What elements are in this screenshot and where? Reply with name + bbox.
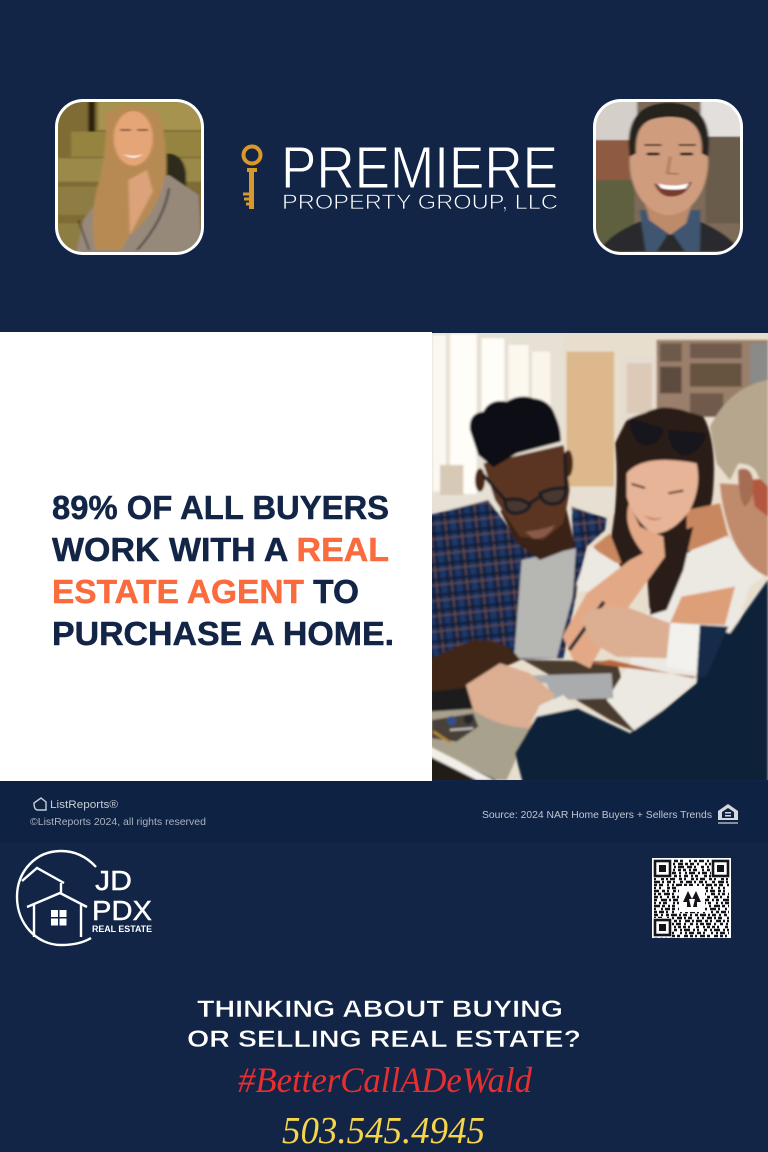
portrait: female agent — [54, 99, 206, 257]
table surface — [430, 708, 530, 780]
face — [627, 460, 698, 534]
neck and face — [500, 503, 575, 560]
JD PDX Real Estate logo — [17, 851, 152, 945]
ListReports credit: ListReports® — [50, 799, 118, 811]
header: agents and brokerage logo — [54, 99, 745, 257]
keys — [432, 713, 478, 743]
logo text: REAL ESTATE — [92, 924, 152, 934]
suit — [515, 580, 768, 785]
woman hair top — [646, 406, 688, 414]
agent head — [720, 483, 768, 577]
logo wordmark: PREMIERE — [281, 135, 558, 201]
icon: house window — [51, 910, 66, 926]
logo wordmark: PROPERTY GROUP, LLC — [282, 190, 558, 214]
photo: agent showing tablet to couple — [430, 330, 768, 785]
call to action — [187, 996, 581, 1152]
logo text: JD — [95, 865, 132, 896]
tee — [514, 548, 576, 658]
main panel: statistic — [0, 332, 432, 781]
footer band: credits — [0, 781, 768, 843]
glass table — [523, 660, 637, 733]
QR modules — [654, 861, 729, 936]
headline: PURCHASE A HOME. — [52, 615, 394, 652]
hair — [470, 396, 561, 467]
QR code — [652, 858, 731, 938]
tagline — [187, 996, 581, 1053]
man hand — [430, 640, 520, 692]
logo text — [92, 865, 152, 934]
glasses — [483, 453, 566, 513]
hair strand over dress — [650, 527, 693, 615]
icon: circle and houses — [17, 851, 96, 945]
logo text: PDX — [92, 895, 152, 926]
dress — [577, 536, 763, 733]
sunglasses — [630, 418, 707, 455]
ListReports credit: ©ListReports 2024, all rights reserved — [30, 816, 206, 828]
ListReports credit — [30, 798, 206, 828]
headline: WORK WITH A REAL — [52, 531, 389, 568]
agent hands and cuff — [466, 663, 555, 728]
icon: equal housing opportunity — [718, 804, 738, 824]
headline — [52, 489, 394, 652]
white text panel — [0, 332, 432, 781]
tagline: OR SELLING REAL ESTATE? — [187, 1026, 581, 1053]
phone number: 503.545.4945 — [282, 1110, 485, 1152]
icon: ListReports mark — [34, 798, 46, 810]
headline: 89% OF ALL BUYERS — [52, 489, 389, 526]
source line: Source: 2024 NAR Home Buyers + Sellers Trends — [482, 809, 712, 821]
icon: gold key — [243, 146, 260, 209]
QR centre logo — [679, 886, 705, 912]
pen — [569, 602, 604, 650]
portrait: male agent — [593, 99, 745, 257]
headline: ESTATE AGENT TO — [52, 573, 359, 610]
tagline: THINKING ABOUT BUYING — [197, 996, 563, 1023]
shirt — [430, 500, 607, 670]
tablet — [533, 672, 614, 702]
woman hand and forearm — [563, 503, 665, 668]
dark lower area behind hands — [430, 677, 530, 723]
hashtag: #BetterCallADeWald — [238, 1060, 533, 1100]
QR finder patterns — [653, 859, 730, 937]
woman hair back — [610, 410, 714, 613]
woman right arm — [670, 587, 735, 625]
woman shoulders — [593, 503, 728, 563]
